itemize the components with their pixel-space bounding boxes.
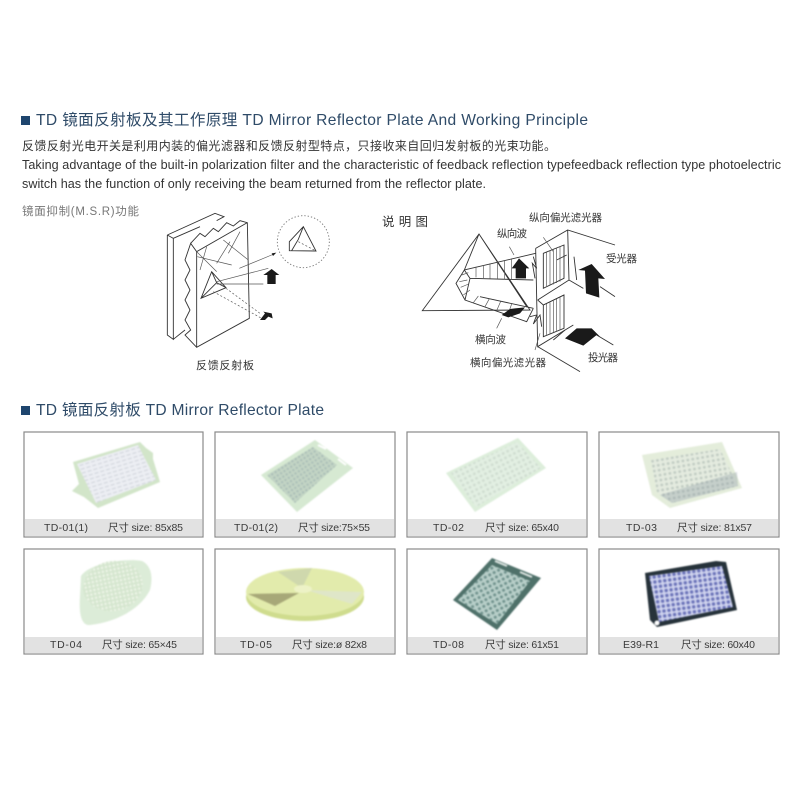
photo: TD-05 reflector <box>246 568 364 621</box>
caption: TD-01(2) <box>234 521 370 534</box>
labels: polarization diagram: 横向偏光滤光器 <box>470 356 546 369</box>
caption: TD-02: TD-02 <box>433 522 464 534</box>
caption: TD-04: TD-04 <box>50 639 82 651</box>
labels: polarization diagram: 投光器 <box>588 351 618 364</box>
photo: TD-01(2) reflector <box>261 440 353 512</box>
photo: TD-03 reflector <box>642 442 742 508</box>
product card: TD-03 <box>599 432 779 537</box>
caption: TD-08: 尺寸 size: 61x51 <box>485 638 559 651</box>
photo: TD-08 reflector <box>453 558 541 630</box>
caption: TD-03: TD-03 <box>626 522 657 534</box>
photo: E39-R1 reflector <box>645 561 737 627</box>
product card: TD-01(2) <box>215 432 395 537</box>
labels: polarization diagram <box>470 211 638 369</box>
product card: TD-05 <box>215 549 395 654</box>
product card: TD-08 <box>407 549 587 654</box>
heading: working principle: TD 镜面反射板及其工作原理 TD Mirror Reflector Plate And Working Principle <box>36 110 588 129</box>
caption: TD-03: 尺寸 size: 81x57 <box>677 521 752 534</box>
caption: TD-05: TD-05 <box>240 639 272 651</box>
caption: E39-R1: 尺寸 size: 60x40 <box>681 638 755 651</box>
photo: TD-04 reflector <box>78 555 151 625</box>
label: feedback reflector plate: 反馈反射板 <box>196 358 254 372</box>
description text: Taking advantage of the built-in polarization filter and the characteristic of feedback reflection typefeedback reflection type photoelectric <box>22 158 781 172</box>
label: schematic: 说 明 图 <box>382 214 428 229</box>
description text: 反馈反射光电开关是利用内装的偏光滤器和反馈反射型特点，只接收来自回归发射板的光束功能。 <box>22 138 556 153</box>
caption: TD-08: TD-08 <box>433 639 464 651</box>
caption: TD-01(2): 尺寸 size:75×55 <box>298 521 370 534</box>
caption: TD-01(1): 尺寸 size: 85x85 <box>108 521 183 534</box>
caption: TD-02 <box>433 521 559 534</box>
product card: TD-02 <box>407 432 587 537</box>
diagram: feedback reflector plate <box>167 213 329 347</box>
caption: TD-01(2): TD-01(2) <box>234 522 278 534</box>
labels: polarization diagram: 纵向波 <box>497 227 528 240</box>
labels: polarization diagram: 受光器 <box>606 252 638 265</box>
caption: E39-R1: E39-R1 <box>623 639 659 651</box>
product card: E39-R1 <box>599 549 779 654</box>
caption: TD-01(1): TD-01(1) <box>44 522 88 534</box>
product card: TD-04 <box>24 549 203 654</box>
photo: TD-01(1) reflector <box>72 442 160 508</box>
product card: TD-01(1) <box>24 432 203 537</box>
caption: TD-02: 尺寸 size: 65x40 <box>485 521 559 534</box>
caption: TD-04 <box>50 638 177 651</box>
description text: switch has the function of only receiving the beam returned from the reflector plate. <box>22 177 486 191</box>
caption: E39-R1 <box>623 638 755 651</box>
caption: TD-05: 尺寸 size:ø 82x8 <box>292 638 367 651</box>
photo: TD-02 reflector <box>446 438 546 512</box>
caption: TD-04: 尺寸 size: 65×45 <box>102 638 177 651</box>
labels: polarization diagram: 横向波 <box>475 333 506 346</box>
label: mirror suppression function: 镜面抑制(M.S.R)功能 <box>22 204 140 218</box>
caption: TD-05 <box>240 638 367 651</box>
diagram: polarization principle <box>422 230 615 372</box>
description text <box>22 138 781 191</box>
caption: TD-03 <box>626 521 752 534</box>
heading: mirror reflector plate: TD 镜面反射板 TD Mirror Reflector Plate <box>36 400 324 419</box>
caption: TD-08 <box>433 638 559 651</box>
caption: TD-01(1) <box>44 521 183 534</box>
labels: polarization diagram: 纵向偏光滤光器 <box>529 211 602 224</box>
